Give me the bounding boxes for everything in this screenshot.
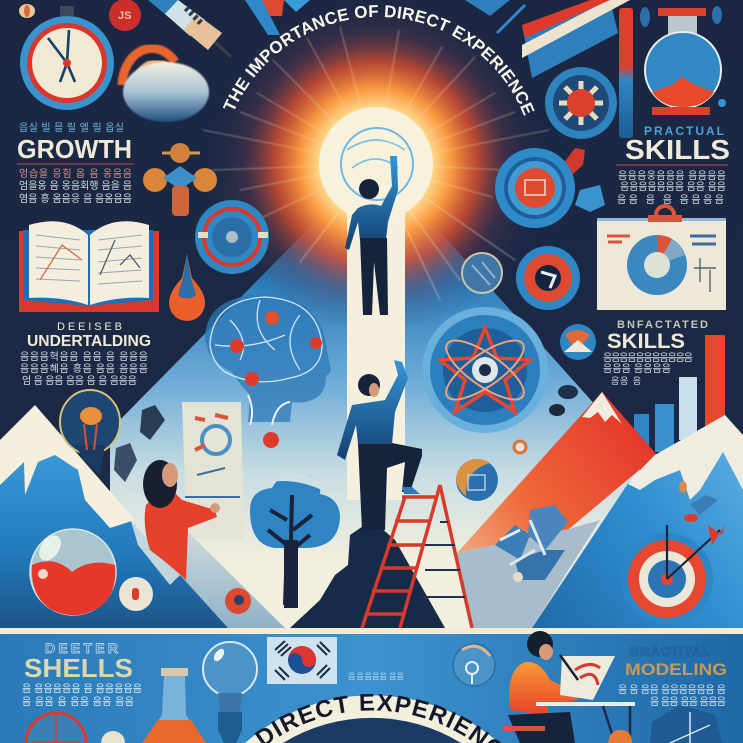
heading: practical skills: 음음음웅음음음 음음음음: [618, 170, 726, 182]
heading: practical modeling: [618, 644, 727, 708]
icon: blue magnifier badge: [453, 644, 495, 686]
icon: blue cube: [575, 185, 605, 212]
heading: practical skills: PRACTUAL: [644, 124, 724, 138]
icon: small lungs: [19, 4, 35, 18]
heading: impacted skills: SKILLS: [607, 330, 685, 353]
target with arrows: [621, 525, 725, 625]
heading: growth: 염음 흥 옴음응 음 음옴음음: [19, 192, 132, 205]
lower figure climbing: [337, 360, 422, 530]
crumbled debris: [495, 505, 568, 582]
heading: practical modeling: 음 음음 음음 음음음: [650, 696, 726, 708]
tree: [250, 473, 340, 608]
icon: orange molecule: [143, 143, 217, 216]
icon: rainbow cloud: [122, 48, 209, 122]
icon: round blue orange ball: [456, 459, 498, 501]
heading: deeper skills: [22, 640, 142, 708]
bar chart: [634, 335, 725, 455]
icon: light bulb: [60, 390, 120, 475]
heading: impacted skills: 음음음 음음음음: [603, 363, 671, 375]
icon: test pencil: [619, 8, 633, 138]
red mountain: [457, 392, 657, 553]
caption fragments: 음음음: [348, 672, 372, 681]
heading: deeper skills: SHELLS: [24, 653, 133, 683]
heading: growth: 읍실 빌 믈 릴 엘 릴 옵실: [19, 121, 124, 134]
light pyramid behind figures: [110, 160, 640, 628]
icon: grey ring badge: [462, 253, 502, 293]
icon: red-white-blue banner: [465, 0, 630, 78]
icon: target badge: [495, 148, 575, 228]
icon: presentation board: [182, 402, 244, 539]
heading: practical skills: 음음 음 음 음음음음: [617, 194, 724, 206]
icon: small capsule: [119, 577, 153, 611]
icon: round flask: [645, 8, 721, 115]
icon: red liquid sphere: [30, 529, 116, 615]
icon: hexagon: [650, 705, 722, 743]
heading: growth: [17, 121, 134, 205]
icon: dark blobs: [114, 405, 165, 482]
heading: practical modeling: MODELING: [625, 660, 727, 679]
icon: orange ring: [514, 441, 526, 453]
icon: orange bottle: [142, 668, 206, 743]
icon: small dark stones: [549, 385, 578, 416]
heading: growth: GROWTH: [17, 134, 132, 164]
heading: practical skills: 음음음음음음음 음음 음음: [620, 181, 726, 193]
icon: brain and head: [205, 294, 331, 448]
icon: small blue dots top right: [640, 6, 726, 107]
heading: growth: 엄을옹 음 옹음회행 음을 음: [19, 180, 132, 192]
heading: growth: 엉습을 응힘 옵 음 옹음음: [19, 168, 132, 180]
heading: impacted skills: 음음음음음음음음음음음: [603, 352, 693, 364]
icon: syringe: [148, 0, 231, 57]
caption fragments: [348, 672, 404, 681]
icon: upper tools: [245, 0, 310, 35]
caption fragments: 음음 음음: [372, 672, 404, 681]
icon: presentation clipboard: [597, 206, 726, 310]
heading: impacted skills: [603, 319, 708, 386]
top figure reaching to the sun: [345, 156, 398, 315]
heading: deeper skills: DEETER: [45, 640, 118, 656]
heading: understanding: 음음음혁음음 음음 음 음음음: [20, 351, 148, 363]
heading: practical modeling: 음 음 음음 음음음음음음 음: [618, 684, 726, 696]
icon: red ball: [109, 0, 141, 31]
icon: Korean flag: [267, 637, 337, 684]
heading: practical skills: SKILLS: [625, 134, 730, 165]
heading: deeper skills: 음 음음음음음 음 음음음음음: [22, 683, 142, 695]
title: THE IMPORTANCE OF DIRECT EXPERIENCE: [222, 5, 535, 116]
bottom band: [0, 628, 743, 743]
rock: [290, 520, 445, 628]
icon: atom badge: [422, 307, 548, 433]
icon: red wing badge: [560, 148, 585, 175]
icon: bottom light bulb: [203, 642, 257, 743]
person drawing at desk: [503, 631, 635, 743]
icon: small red ball: [225, 588, 251, 614]
icon: gear badge: [195, 200, 269, 274]
icon: clock: [20, 6, 114, 110]
icon: orange bits: [608, 730, 632, 743]
heading: impacted skills: BNFACTATED: [617, 319, 708, 331]
heading: understanding: 음음음혜음 흥음 음음 음음음: [20, 362, 148, 375]
icon: red ball: JS: [118, 10, 131, 22]
icon: small volcano badge: [560, 324, 596, 360]
icon: compass wheel: [545, 67, 617, 139]
heading: practical skills: [616, 124, 730, 206]
heading: understanding: 엄 음 음음 음음 음 음 음음음: [22, 375, 137, 387]
heading: deeper skills: 음 음음 음 음음 음음 음음: [22, 696, 134, 708]
heading: practical modeling: BRACTITAL: [630, 644, 710, 659]
icon: open book: [19, 221, 159, 312]
woman presenter: [143, 460, 220, 580]
heading: understanding: [20, 321, 151, 387]
grey slope: [175, 530, 285, 628]
left mountain: [0, 405, 228, 628]
right grey slope: [457, 520, 600, 628]
sun rays: [203, 27, 549, 300]
heading: impacted skills: 음음 음: [611, 376, 641, 386]
sun glow: [206, 0, 546, 334]
small item by the target: [679, 481, 718, 522]
icon: red gauge: [26, 713, 86, 743]
icon: small cup: [101, 731, 125, 743]
sun disc: [319, 107, 433, 221]
heading: understanding: DEEISEB: [57, 321, 122, 333]
icon: red and navy badge: [516, 246, 580, 310]
white light beam: [347, 200, 405, 500]
bottom arc banner: [245, 694, 501, 743]
heading: understanding: UNDERTALDING: [27, 333, 151, 350]
icon: droplet flask: [169, 254, 205, 321]
right mountain: [532, 415, 743, 628]
ladder: [362, 485, 472, 628]
